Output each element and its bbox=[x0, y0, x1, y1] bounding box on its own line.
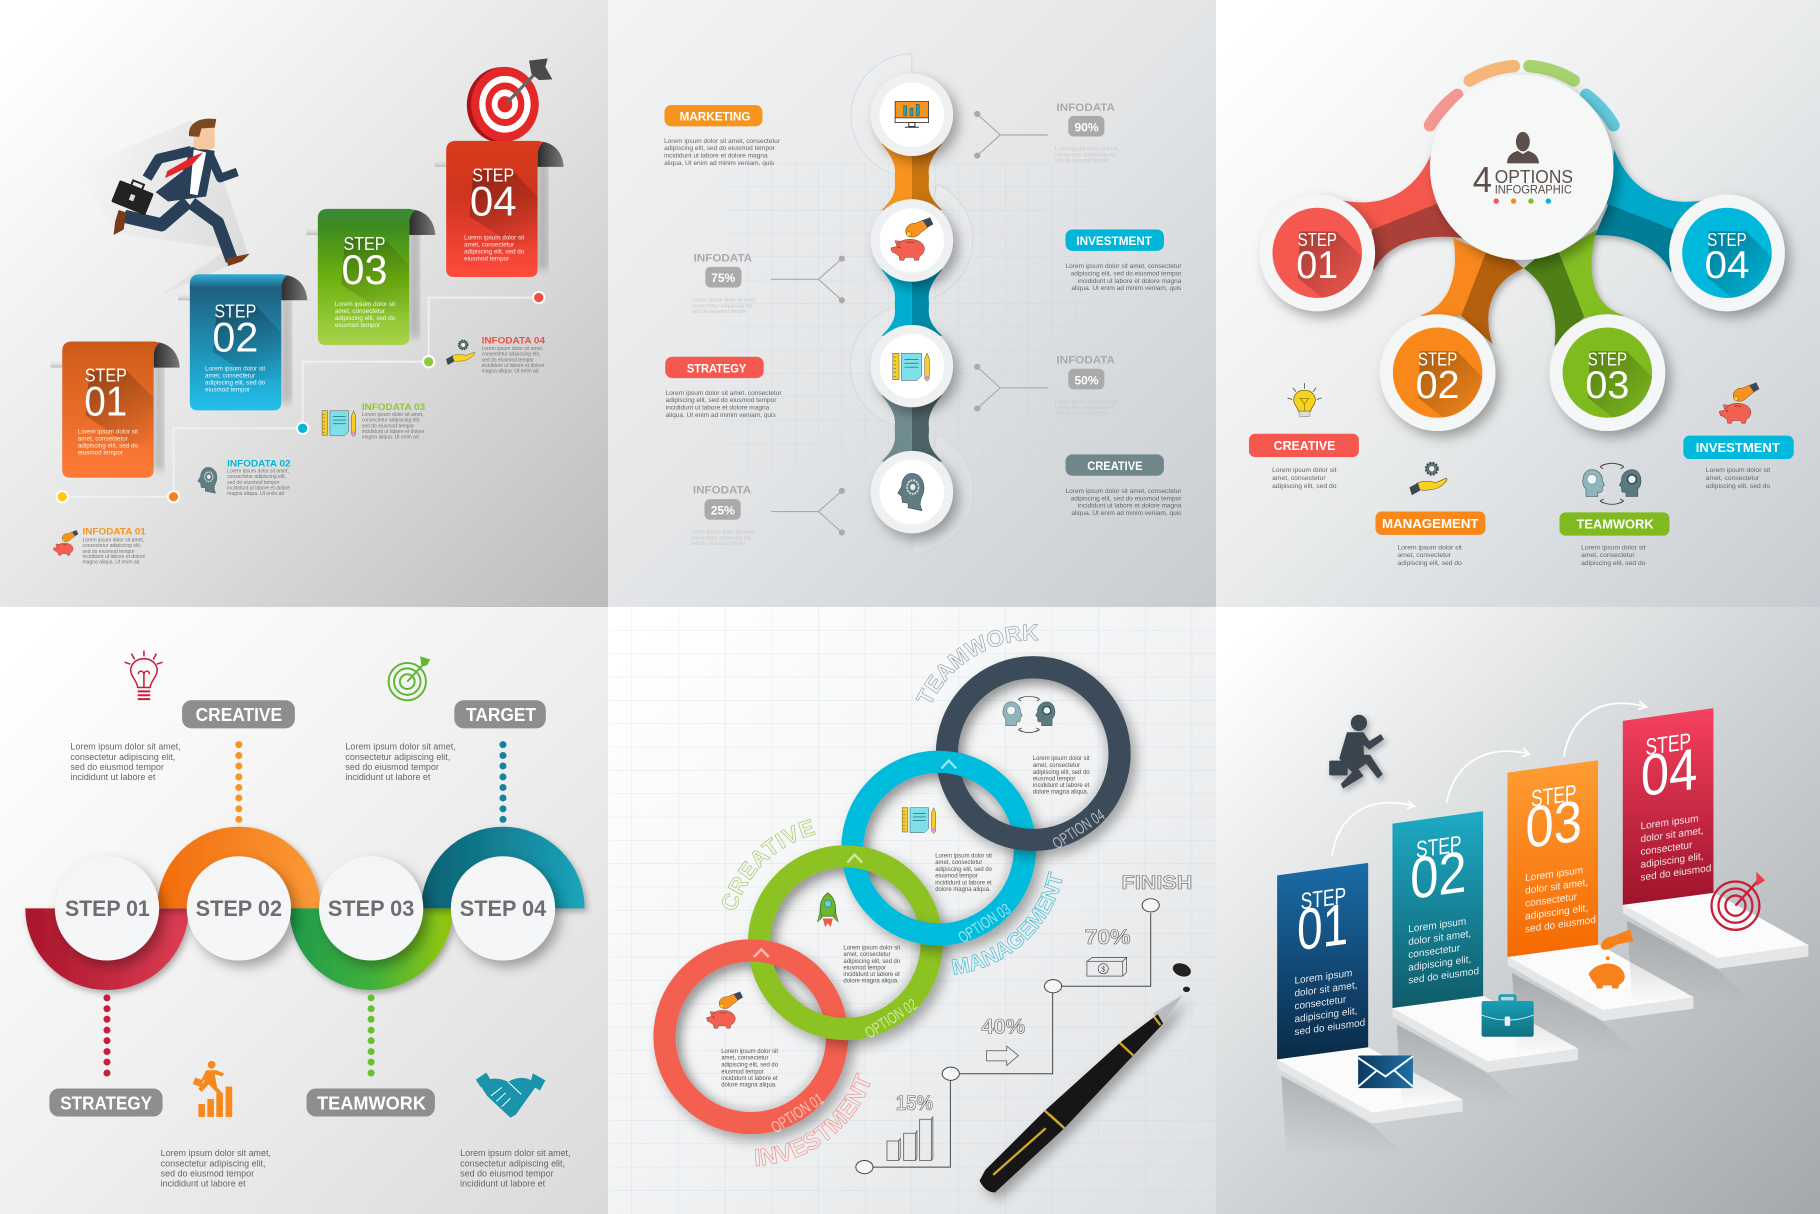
target text: consectetur adipiscing elit, bbox=[345, 752, 450, 762]
timeline node 4: head with gear bbox=[871, 451, 953, 533]
panel: wave step timeline bbox=[0, 607, 608, 1214]
infodata 90% bbox=[974, 102, 1120, 164]
shelf 03 bbox=[1508, 945, 1693, 1055]
infodata 03: magna aliqua. Ut enim ad bbox=[362, 434, 419, 440]
infodata 02: INFODATA 02 bbox=[227, 458, 291, 468]
TEAMWORK label bbox=[1560, 463, 1669, 567]
central circle title: OPTIONS bbox=[1495, 166, 1573, 187]
infodata 01: INFODATA 01 bbox=[82, 526, 146, 536]
panel: four options radial bbox=[1216, 0, 1820, 607]
step 02 arrow bbox=[1446, 748, 1529, 803]
infodata 25%: Lorem ipsum dolor sit amet, bbox=[691, 530, 755, 536]
label CREATIVE: CREATIVE bbox=[1087, 460, 1143, 473]
shelf 02 bbox=[1392, 996, 1578, 1106]
ribbon step 04: 04 bbox=[470, 178, 517, 225]
infodata 50%: sed do eiusmod tempor bbox=[1055, 411, 1110, 417]
infodata 75%: Lorem ipsum dolor sit amet, bbox=[692, 297, 757, 303]
branch step 01 bbox=[1342, 150, 1464, 270]
banner step 02: dolor sit amet, bbox=[1408, 929, 1471, 948]
label MARKETING: MARKETING bbox=[680, 111, 750, 124]
banner step 01: dolor sit amet, bbox=[1294, 980, 1357, 1000]
infodata 90%: 90% bbox=[1074, 120, 1099, 134]
timeline node 3: documents bbox=[871, 325, 953, 407]
infodata 03: sed do eiusmod tempor bbox=[362, 424, 414, 430]
step 03 circle: STEP 03 bbox=[328, 896, 414, 921]
target text: incididunt ut labore et bbox=[345, 772, 431, 782]
CREATIVE pill bbox=[182, 700, 295, 728]
banner step 03: dolor sit amet, bbox=[1525, 877, 1588, 897]
INVESTMENT label: Lorem ipsum dolor sit bbox=[1706, 467, 1770, 474]
infodata 90%: sed do eiusmod tempor bbox=[1055, 158, 1110, 164]
banner step 03 bbox=[1507, 760, 1598, 957]
STRATEGY pill: STRATEGY bbox=[60, 1093, 152, 1114]
shelf 01 bbox=[1277, 1047, 1463, 1157]
node step 01: STEP bbox=[1298, 230, 1337, 250]
panel: isometric steps bbox=[1216, 607, 1820, 1214]
ring texts: incididunt ut labore et bbox=[935, 880, 992, 886]
ribbon step 01: eiusmod tempor bbox=[78, 450, 123, 457]
coloured arc segments bbox=[1430, 66, 1614, 125]
INVESTMENT label bbox=[1683, 382, 1794, 490]
dotted line teamwork bbox=[368, 994, 375, 1076]
MANAGEMENT label: Lorem ipsum dolor sit bbox=[1397, 544, 1462, 551]
banner step 03: STEP bbox=[1531, 780, 1576, 812]
sketched labels: 15% bbox=[896, 1092, 933, 1115]
infodata 01: sed do eiusmod tempor bbox=[82, 549, 135, 555]
sketched ring titles bbox=[722, 624, 1062, 1166]
ring texts: eiusmod tempor bbox=[721, 1069, 764, 1075]
infodata 04: incididunt ut labore et dolore bbox=[482, 363, 545, 369]
ring texts: amet, consectetur bbox=[935, 860, 982, 866]
label INVESTMENT: INVESTMENT bbox=[1076, 235, 1152, 248]
label MARKETING: Lorem ipsum dolor sit amet, consectetur bbox=[664, 138, 781, 145]
ring texts: eiusmod tempor bbox=[1033, 776, 1075, 782]
banner step 04 bbox=[1623, 708, 1713, 905]
central circle title: 4 bbox=[1473, 160, 1492, 200]
stepped connector line with nodes bbox=[56, 291, 545, 503]
infodata 75%: sed do eiusmod tempor bbox=[692, 309, 747, 315]
step 04 circle bbox=[451, 856, 555, 961]
MANAGEMENT label: MANAGEMENT bbox=[1382, 516, 1479, 531]
label CREATIVE: adipiscing elit, sed do eiusmod tempor bbox=[1071, 495, 1182, 502]
sketched labels: FINISH bbox=[1122, 872, 1192, 894]
ribbon step 04: eiusmod tempor bbox=[464, 256, 509, 263]
shelf 04 bbox=[1623, 892, 1808, 1003]
label INVESTMENT: incididunt ut labore et dolore magna bbox=[1078, 278, 1182, 285]
TEAMWORK label: adipiscing elit, sed do bbox=[1581, 560, 1646, 567]
step 03 arrow bbox=[1564, 701, 1646, 757]
ribbon step 03: Lorem ipsum dolor sit bbox=[335, 301, 395, 308]
label MARKETING: adipiscing elit, sed do eiusmod tempor bbox=[664, 145, 776, 152]
label STRATEGY: adipiscing elit, sed do eiusmod tempor bbox=[666, 397, 777, 404]
banner step 02: consectetur bbox=[1408, 943, 1461, 961]
panel: staircase ribbons bbox=[0, 0, 608, 607]
sketched ring titles: CREATIVE bbox=[722, 819, 816, 910]
ribbon step 02: Lorem ipsum dolor sit bbox=[205, 365, 265, 372]
ribbon step 04: Lorem ipsum dolor sit bbox=[464, 235, 525, 242]
banner step 03: Lorem ipsum bbox=[1525, 865, 1583, 884]
node step 02: 02 bbox=[1416, 364, 1460, 407]
banner step 04: 04 bbox=[1641, 737, 1697, 809]
banner step 01: consectetur bbox=[1294, 994, 1347, 1013]
target with dart bbox=[467, 58, 552, 143]
sketched ring titles: MANAGEMENT bbox=[952, 871, 1062, 975]
ribbon step 03: adipiscing elit, sed do bbox=[335, 315, 396, 322]
strategy text: consectetur adipiscing elit, bbox=[161, 1158, 265, 1168]
infodata 04: sed do eiusmod tempor bbox=[482, 357, 534, 363]
target text: sed do eiusmod tempor bbox=[345, 762, 439, 772]
ribbon step 02: STEP bbox=[214, 300, 256, 321]
node step 03: STEP bbox=[1588, 350, 1627, 370]
sketched ring titles: INVESTMENT bbox=[754, 1072, 870, 1166]
banner step 04: Lorem ipsum bbox=[1641, 813, 1698, 832]
sketched icons bbox=[887, 957, 1127, 1160]
banner step 04: consectetur bbox=[1641, 840, 1693, 858]
option labels bbox=[768, 806, 1108, 1137]
banner step 02 bbox=[1392, 811, 1483, 1008]
infodata 01: incididunt ut labore et dolore bbox=[82, 554, 146, 560]
TEAMWORK pill bbox=[307, 1089, 435, 1117]
label STRATEGY bbox=[665, 357, 782, 419]
label INVESTMENT bbox=[1066, 230, 1182, 292]
infodata 90%: INFODATA bbox=[1057, 102, 1115, 114]
ring texts: amet, consectetur bbox=[721, 1056, 768, 1062]
strategy text: incididunt ut labore et bbox=[161, 1179, 246, 1189]
CREATIVE label bbox=[1249, 383, 1359, 490]
ribbon step 02: amet, consectetur bbox=[205, 372, 255, 379]
branch step 02 bbox=[1419, 238, 1524, 344]
strategy text: Lorem ipsum dolor sit amet, bbox=[161, 1148, 271, 1158]
banner step 01 bbox=[1277, 863, 1368, 1059]
sketched icons: $ bbox=[1101, 964, 1105, 973]
infodata 02: Lorem ipsum dolor sit amet, bbox=[227, 469, 289, 475]
infodata 02: consectetur adipiscing elit, bbox=[227, 474, 286, 480]
ribbon step 02 bbox=[178, 274, 307, 410]
banner step 01: adipiscing elit, bbox=[1294, 1006, 1357, 1025]
chevrons bbox=[754, 761, 956, 957]
INVESTMENT label: INVESTMENT bbox=[1696, 440, 1780, 455]
TEAMWORK label: TEAMWORK bbox=[1576, 517, 1654, 532]
label MARKETING: incididunt ut labore et dolore magna bbox=[664, 153, 768, 160]
label MARKETING: aliqua. Ut enim ad minim veniam, quis bbox=[664, 160, 775, 167]
running businessman bbox=[74, 119, 250, 296]
step 01 circle bbox=[55, 856, 159, 961]
label INVESTMENT: aliqua. Ut enim ad minim veniam, quis bbox=[1071, 285, 1182, 292]
ring texts: eiusmod tempor bbox=[843, 965, 886, 971]
ring texts: eiusmod tempor bbox=[935, 874, 978, 880]
banner step 01: 01 bbox=[1297, 892, 1348, 963]
node step 03: 03 bbox=[1585, 364, 1629, 407]
ribbon step 04: adipiscing elit, sed do bbox=[464, 249, 525, 256]
infodata 02: magna aliqua. Ut enim ad bbox=[227, 491, 284, 497]
MANAGEMENT label: adipiscing elit, sed do bbox=[1397, 560, 1462, 567]
panel: linked rings bbox=[608, 605, 1216, 1214]
infodata 25%: 25% bbox=[711, 503, 735, 517]
infodata 90%: consectetur adipiscing elit, bbox=[1055, 152, 1117, 158]
CREATIVE label: CREATIVE bbox=[1274, 438, 1336, 453]
STRATEGY pill bbox=[49, 1089, 163, 1117]
infodata 25%: sed do eiusmod tempor bbox=[691, 541, 746, 547]
ribbon step 01: 01 bbox=[84, 377, 127, 424]
runner silhouette bbox=[1329, 715, 1384, 789]
banner step 04: dolor sit amet, bbox=[1641, 826, 1703, 845]
teamwork text: Lorem ipsum dolor sit amet, bbox=[460, 1148, 570, 1158]
banner step 04: STEP bbox=[1646, 728, 1691, 760]
infodata 01: Lorem ipsum dolor sit amet, bbox=[82, 537, 144, 543]
central circle title: INFOGRAPHIC bbox=[1495, 184, 1572, 197]
infodata 03: Lorem ipsum dolor sit amet, bbox=[362, 412, 423, 418]
ring texts: adipiscing elit, sed do bbox=[935, 867, 993, 873]
infodata 75%: INFODATA bbox=[694, 252, 752, 264]
infodata 01: magna aliqua. Ut enim ad bbox=[82, 560, 140, 566]
label CREATIVE: Lorem ipsum dolor sit amet, consectetur bbox=[1066, 488, 1182, 495]
TEAMWORK label: amet, consectetur bbox=[1581, 552, 1635, 559]
sketched labels: 40% bbox=[981, 1016, 1025, 1039]
ring texts bbox=[721, 756, 1090, 1089]
ring texts: Lorem ipsum dolor sit bbox=[843, 945, 901, 951]
ribbon step 02: 02 bbox=[212, 313, 258, 360]
step 02 circle bbox=[187, 856, 291, 961]
ribbon step 03 bbox=[306, 209, 435, 345]
branch step 04 bbox=[1595, 150, 1703, 272]
ring texts: incididunt ut labore et bbox=[843, 972, 900, 978]
ring texts: dolore magna aliqua. bbox=[843, 979, 899, 985]
node step 04: STEP bbox=[1707, 230, 1747, 250]
ring option 04 bbox=[947, 667, 1120, 840]
infodata 50%: Lorem ipsum dolor sit amet, bbox=[1055, 399, 1120, 405]
banner step 03: 03 bbox=[1526, 788, 1582, 861]
label STRATEGY: incididunt ut labore et dolore magna bbox=[666, 405, 770, 412]
MANAGEMENT label bbox=[1375, 463, 1485, 567]
dotted line target bbox=[499, 741, 506, 823]
ribbon step 03: amet, consectetur bbox=[335, 308, 385, 315]
timeline node 1: monitor bbox=[871, 74, 953, 156]
ribbon step 04: amet, consectetur bbox=[464, 242, 514, 249]
banner step 02: adipiscing elit, bbox=[1408, 954, 1471, 974]
infodata 04: consectetur adipiscing elit, bbox=[482, 352, 540, 358]
banner step 03: consectetur bbox=[1525, 892, 1578, 910]
strategy text: sed do eiusmod tempor bbox=[161, 1168, 254, 1178]
ring texts: adipiscing elit, sed do bbox=[843, 959, 901, 965]
icon: briefcase bbox=[1482, 996, 1534, 1037]
ribbon step 03: eiusmod tempor bbox=[335, 322, 380, 329]
ring texts: dolore magna aliqua. bbox=[1033, 790, 1089, 796]
node step 04 bbox=[1669, 195, 1785, 311]
target text: Lorem ipsum dolor sit amet, bbox=[345, 742, 456, 752]
step 02 circle: STEP 02 bbox=[196, 896, 282, 921]
ring texts: amet, consectetur bbox=[1033, 763, 1080, 769]
CREATIVE pill: CREATIVE bbox=[196, 704, 282, 725]
infodata 02: sed do eiusmod tempor bbox=[227, 480, 280, 486]
node step 04: 04 bbox=[1705, 244, 1749, 287]
ring texts: adipiscing elit, sed do bbox=[721, 1063, 779, 1069]
node step 03 bbox=[1549, 314, 1665, 431]
option labels: OPTION 02 bbox=[862, 996, 921, 1042]
infodata 04: Lorem ipsum dolor sit amet, bbox=[482, 346, 543, 352]
ribbon step 02: adipiscing elit, sed do bbox=[205, 379, 266, 386]
infodata 01 bbox=[53, 526, 146, 566]
step 01 arrow bbox=[1332, 801, 1414, 856]
infodata 75%: 75% bbox=[711, 271, 736, 285]
TEAMWORK pill: TEAMWORK bbox=[317, 1093, 427, 1114]
label INVESTMENT: adipiscing elit, sed do eiusmod tempor bbox=[1071, 270, 1182, 277]
icon: runner on bars bbox=[193, 1061, 232, 1117]
infodata 75%: consectetur adipiscing elit, bbox=[692, 303, 754, 309]
ribbon step 01: Lorem ipsum dolor sit bbox=[78, 429, 138, 436]
ring texts: adipiscing elit, sed do bbox=[1033, 770, 1090, 776]
ring texts: dolore magna aliqua. bbox=[721, 1083, 777, 1089]
banner step 02: 02 bbox=[1410, 839, 1467, 912]
teamwork text: consectetur adipiscing elit, bbox=[460, 1158, 565, 1168]
ink drops bbox=[1171, 961, 1193, 992]
node step 01 bbox=[1259, 195, 1375, 311]
timeline node 2: piggy bbox=[871, 199, 953, 282]
branch step 03 bbox=[1524, 230, 1625, 346]
ring option 02 bbox=[759, 856, 932, 1029]
banner step 04: sed do eiusmod bbox=[1641, 863, 1711, 884]
panel: vertical timeline bbox=[608, 0, 1216, 607]
ring interlock overlaps bbox=[728, 762, 1000, 976]
label MARKETING bbox=[664, 105, 781, 167]
ribbon step 03: STEP bbox=[343, 233, 385, 254]
infodata 25% bbox=[691, 485, 845, 547]
semi-circular bands bbox=[25, 827, 585, 990]
CREATIVE label: Lorem ipsum dolor sit bbox=[1272, 467, 1337, 474]
banner step 02: STEP bbox=[1416, 831, 1462, 863]
ring texts: Lorem ipsum dolor sit bbox=[721, 1049, 778, 1055]
creative text: consectetur adipiscing elit, bbox=[70, 752, 175, 762]
step 03 circle bbox=[319, 856, 423, 961]
INVESTMENT label: amet, consectetur bbox=[1706, 475, 1760, 482]
CREATIVE label: amet, consectetur bbox=[1272, 475, 1326, 482]
infodata 02: incididunt ut labore et dolore bbox=[227, 485, 290, 491]
infodata 90%: Lorem ipsum dolor sit amet, bbox=[1055, 147, 1120, 153]
banner step 02: sed do eiusmod bbox=[1408, 966, 1479, 987]
option labels: OPTION 03 bbox=[955, 900, 1014, 947]
fountain pen bbox=[980, 995, 1183, 1192]
infodata 75% bbox=[692, 252, 845, 315]
infodata 25%: INFODATA bbox=[693, 485, 751, 497]
infodata 50% bbox=[974, 355, 1120, 417]
sketched labels: 70% bbox=[1085, 926, 1131, 949]
banner step 04: adipiscing elit, bbox=[1641, 851, 1703, 871]
icon: orange piggy bank bbox=[1588, 929, 1633, 989]
label STRATEGY: Lorem ipsum dolor sit amet, consectetur bbox=[666, 390, 782, 397]
banner step 02: Lorem ipsum bbox=[1408, 916, 1466, 935]
TEAMWORK label: Lorem ipsum dolor sit bbox=[1581, 544, 1646, 551]
label INVESTMENT: Lorem ipsum dolor sit amet, consectetur bbox=[1066, 263, 1182, 270]
label CREATIVE: aliqua. Ut enim ad minim veniam, quis bbox=[1071, 510, 1182, 517]
node step 02 bbox=[1380, 314, 1495, 431]
option labels: OPTION 04 bbox=[1049, 806, 1108, 853]
central circle title bbox=[1430, 75, 1614, 260]
connector ribbons bbox=[882, 144, 942, 461]
ribbon step 04: STEP bbox=[472, 165, 514, 186]
creative text: incididunt ut labore et bbox=[70, 772, 156, 782]
infodata 03 bbox=[322, 402, 425, 440]
banner step 03: adipiscing elit, bbox=[1525, 903, 1588, 923]
TARGET pill: TARGET bbox=[466, 704, 536, 725]
infodata 04 bbox=[446, 335, 546, 374]
sketched ring titles: TEAMWORK bbox=[916, 624, 1039, 702]
ribbon step 01: amet, consectetur bbox=[78, 436, 128, 443]
infodata 50%: 50% bbox=[1074, 373, 1099, 387]
infodata 04: INFODATA 04 bbox=[482, 335, 546, 345]
ring option 03 bbox=[852, 762, 1025, 934]
label STRATEGY: aliqua. Ut enim ad minim veniam, quis bbox=[666, 412, 776, 419]
ring hole inner shadows bbox=[676, 679, 1108, 1111]
infodata 03: consectetur adipiscing elit, bbox=[362, 418, 420, 424]
ring texts: dolore magna aliqua. bbox=[935, 887, 991, 893]
INVESTMENT label: adipiscing elit, sed do bbox=[1706, 483, 1770, 490]
teamwork text: sed do eiusmod tempor bbox=[460, 1168, 554, 1178]
infodata 01: consectetur adipiscing elit, bbox=[82, 543, 141, 549]
dotted line strategy bbox=[103, 994, 110, 1076]
node step 02: STEP bbox=[1418, 350, 1457, 370]
creative text: Lorem ipsum dolor sit amet, bbox=[70, 742, 181, 752]
banner step 01: Lorem ipsum bbox=[1294, 968, 1352, 987]
label STRATEGY: STRATEGY bbox=[687, 362, 747, 375]
ribbon step 01: STEP bbox=[85, 365, 127, 386]
icon: red target bbox=[1712, 872, 1765, 930]
step 04 circle: STEP 04 bbox=[460, 896, 546, 921]
ribbon step 04 bbox=[435, 141, 564, 277]
infodata 25%: consectetur adipiscing elit, bbox=[691, 536, 752, 542]
ring texts: incididunt ut labore et bbox=[1033, 783, 1090, 789]
sketched labels bbox=[896, 872, 1192, 1115]
banner step 01: sed do eiusmod bbox=[1294, 1018, 1365, 1038]
label CREATIVE: incididunt ut labore et dolore magna bbox=[1078, 503, 1182, 510]
option labels: OPTION 01 bbox=[768, 1090, 827, 1137]
label CREATIVE bbox=[1066, 454, 1182, 517]
infodata 04: magna aliqua. Ut enim ad bbox=[482, 368, 539, 374]
ring texts: incididunt ut labore et bbox=[721, 1076, 778, 1082]
MANAGEMENT label: amet, consectetur bbox=[1397, 552, 1452, 559]
ribbon step 03: 03 bbox=[342, 246, 387, 293]
creative text: sed do eiusmod tempor bbox=[70, 762, 164, 772]
ribbon step 02: eiusmod tempor bbox=[205, 386, 250, 393]
icon: light bulb bbox=[124, 651, 163, 699]
infodata 02 bbox=[198, 458, 291, 497]
CREATIVE label: adipiscing elit, sed do bbox=[1272, 483, 1337, 490]
sketched growth line bbox=[856, 899, 1159, 1174]
dotted line creative bbox=[235, 741, 242, 823]
banner step 01: STEP bbox=[1301, 882, 1346, 914]
ribbon step 01 bbox=[51, 342, 180, 478]
ring texts: Lorem ipsum dolor sit bbox=[935, 853, 992, 859]
ring texts: amet, consectetur bbox=[843, 952, 891, 958]
infodata 03: INFODATA 03 bbox=[362, 402, 425, 412]
infodata 50%: INFODATA bbox=[1057, 355, 1115, 367]
infodata 50%: consectetur adipiscing elit, bbox=[1055, 405, 1117, 411]
banner step 03: sed do eiusmod bbox=[1525, 915, 1596, 935]
ring icons bbox=[706, 696, 1055, 1028]
step 01 circle: STEP 01 bbox=[65, 896, 150, 921]
ring texts: Lorem ipsum dolor sit bbox=[1033, 756, 1090, 762]
icon: envelope bbox=[1358, 1055, 1413, 1088]
node step 01: 01 bbox=[1296, 244, 1338, 287]
icon: handshake bbox=[476, 1073, 545, 1118]
ribbon step 01: adipiscing elit, sed do bbox=[78, 443, 139, 450]
faint halo arcs bbox=[850, 54, 973, 554]
infodata 03: incididunt ut labore et dolore bbox=[362, 429, 425, 435]
TARGET pill bbox=[454, 700, 546, 728]
ring option 01 bbox=[664, 950, 837, 1123]
teamwork text: incididunt ut labore et bbox=[460, 1179, 546, 1189]
icon: green target bbox=[389, 656, 430, 700]
